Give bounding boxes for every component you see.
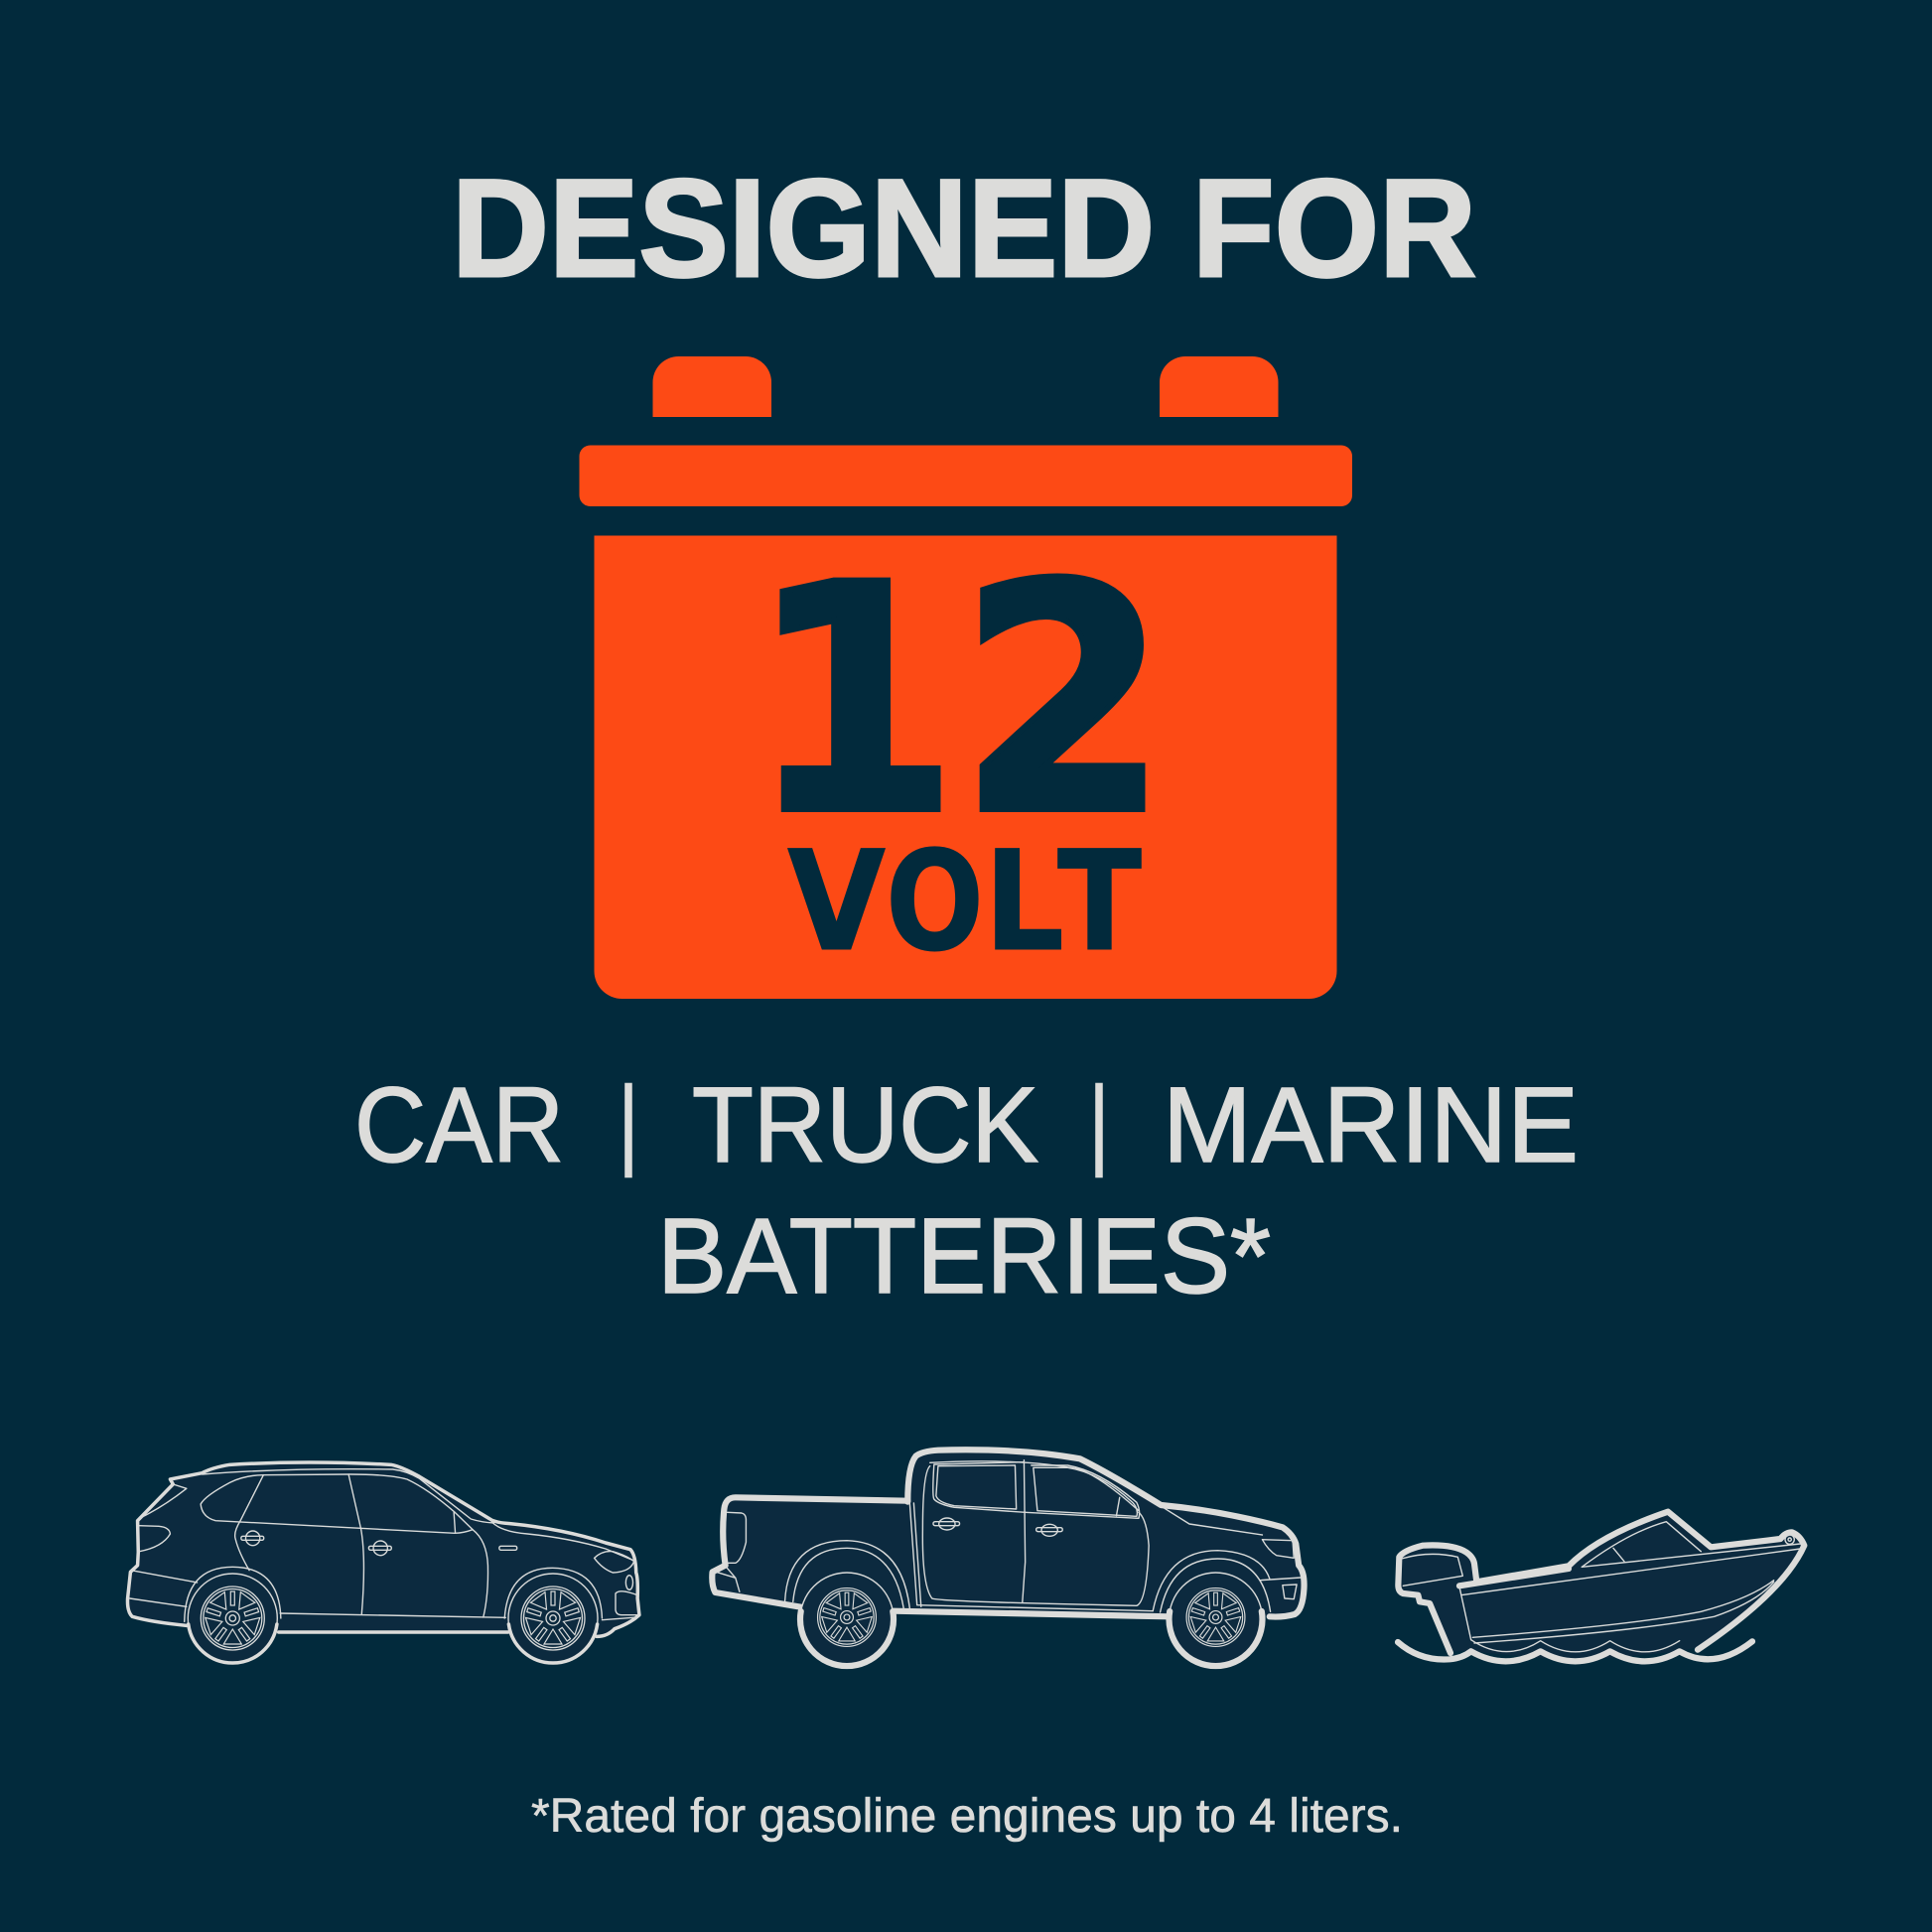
battery lid — [580, 445, 1352, 506]
label VOLT: V — [787, 821, 886, 982]
icon: pickup truck — [712, 1449, 1305, 1666]
battery terminal right — [1160, 356, 1279, 417]
battery types line: | — [1089, 1066, 1109, 1177]
label VOLT: L — [984, 821, 1064, 982]
footnote: *Rated for gasoline engines up to 4 liters. — [531, 1790, 1403, 1843]
battery types line: MARINE — [1163, 1064, 1579, 1184]
battery types line: TRUCK — [692, 1064, 1038, 1184]
truck rear wheel — [800, 1573, 894, 1666]
title: DESIGNED FOR — [452, 150, 1476, 306]
label VOLT: O — [886, 821, 984, 982]
car rear wheel — [188, 1574, 277, 1663]
batteries line: BATTERIES* — [657, 1195, 1271, 1315]
battery types line: | — [619, 1066, 638, 1177]
label VOLT: T — [1057, 821, 1142, 982]
battery body — [594, 536, 1336, 999]
number 12: 12 — [749, 518, 1169, 884]
battery types line — [354, 1064, 1579, 1184]
icon: battery — [580, 356, 1352, 999]
truck front wheel — [1170, 1573, 1263, 1666]
battery terminal left — [653, 356, 771, 417]
battery types line: CAR — [354, 1064, 564, 1184]
car front wheel — [508, 1574, 598, 1663]
label VOLT — [787, 821, 1142, 982]
icon: boat — [1398, 1512, 1804, 1661]
icon: car — [127, 1462, 639, 1663]
